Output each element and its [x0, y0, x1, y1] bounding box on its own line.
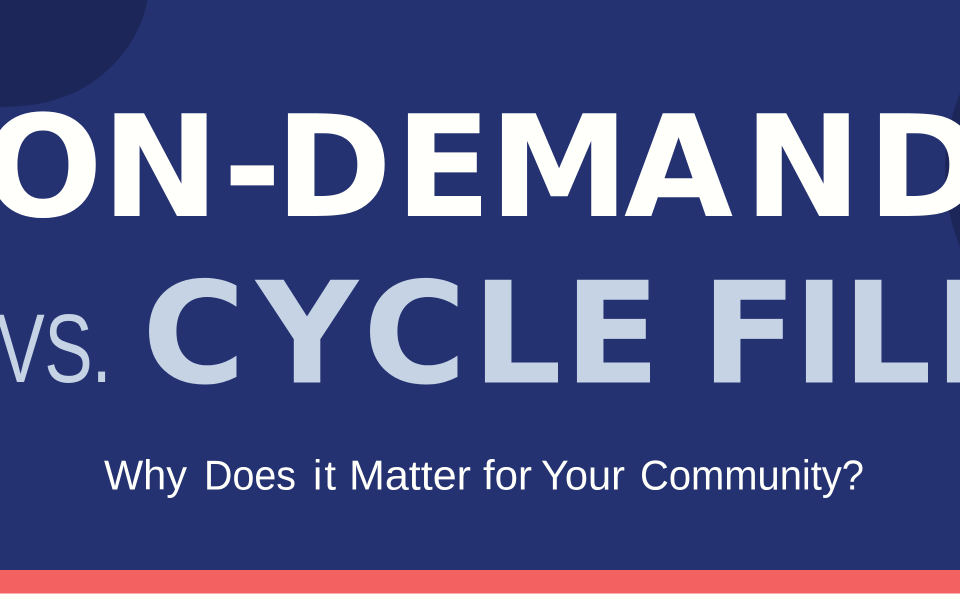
decorative blob: top left [0, 0, 148, 107]
subtitle: for [483, 452, 532, 498]
subtitle: Matter [349, 452, 471, 498]
subtitle: Does [204, 452, 296, 498]
red footer band [0, 570, 960, 594]
decorative circle: right edge [945, 0, 960, 375]
subtitle: Community? [640, 452, 864, 498]
subtitle: Why [104, 452, 187, 498]
subtitle: it [313, 452, 336, 498]
subtitle: Your [541, 452, 625, 498]
